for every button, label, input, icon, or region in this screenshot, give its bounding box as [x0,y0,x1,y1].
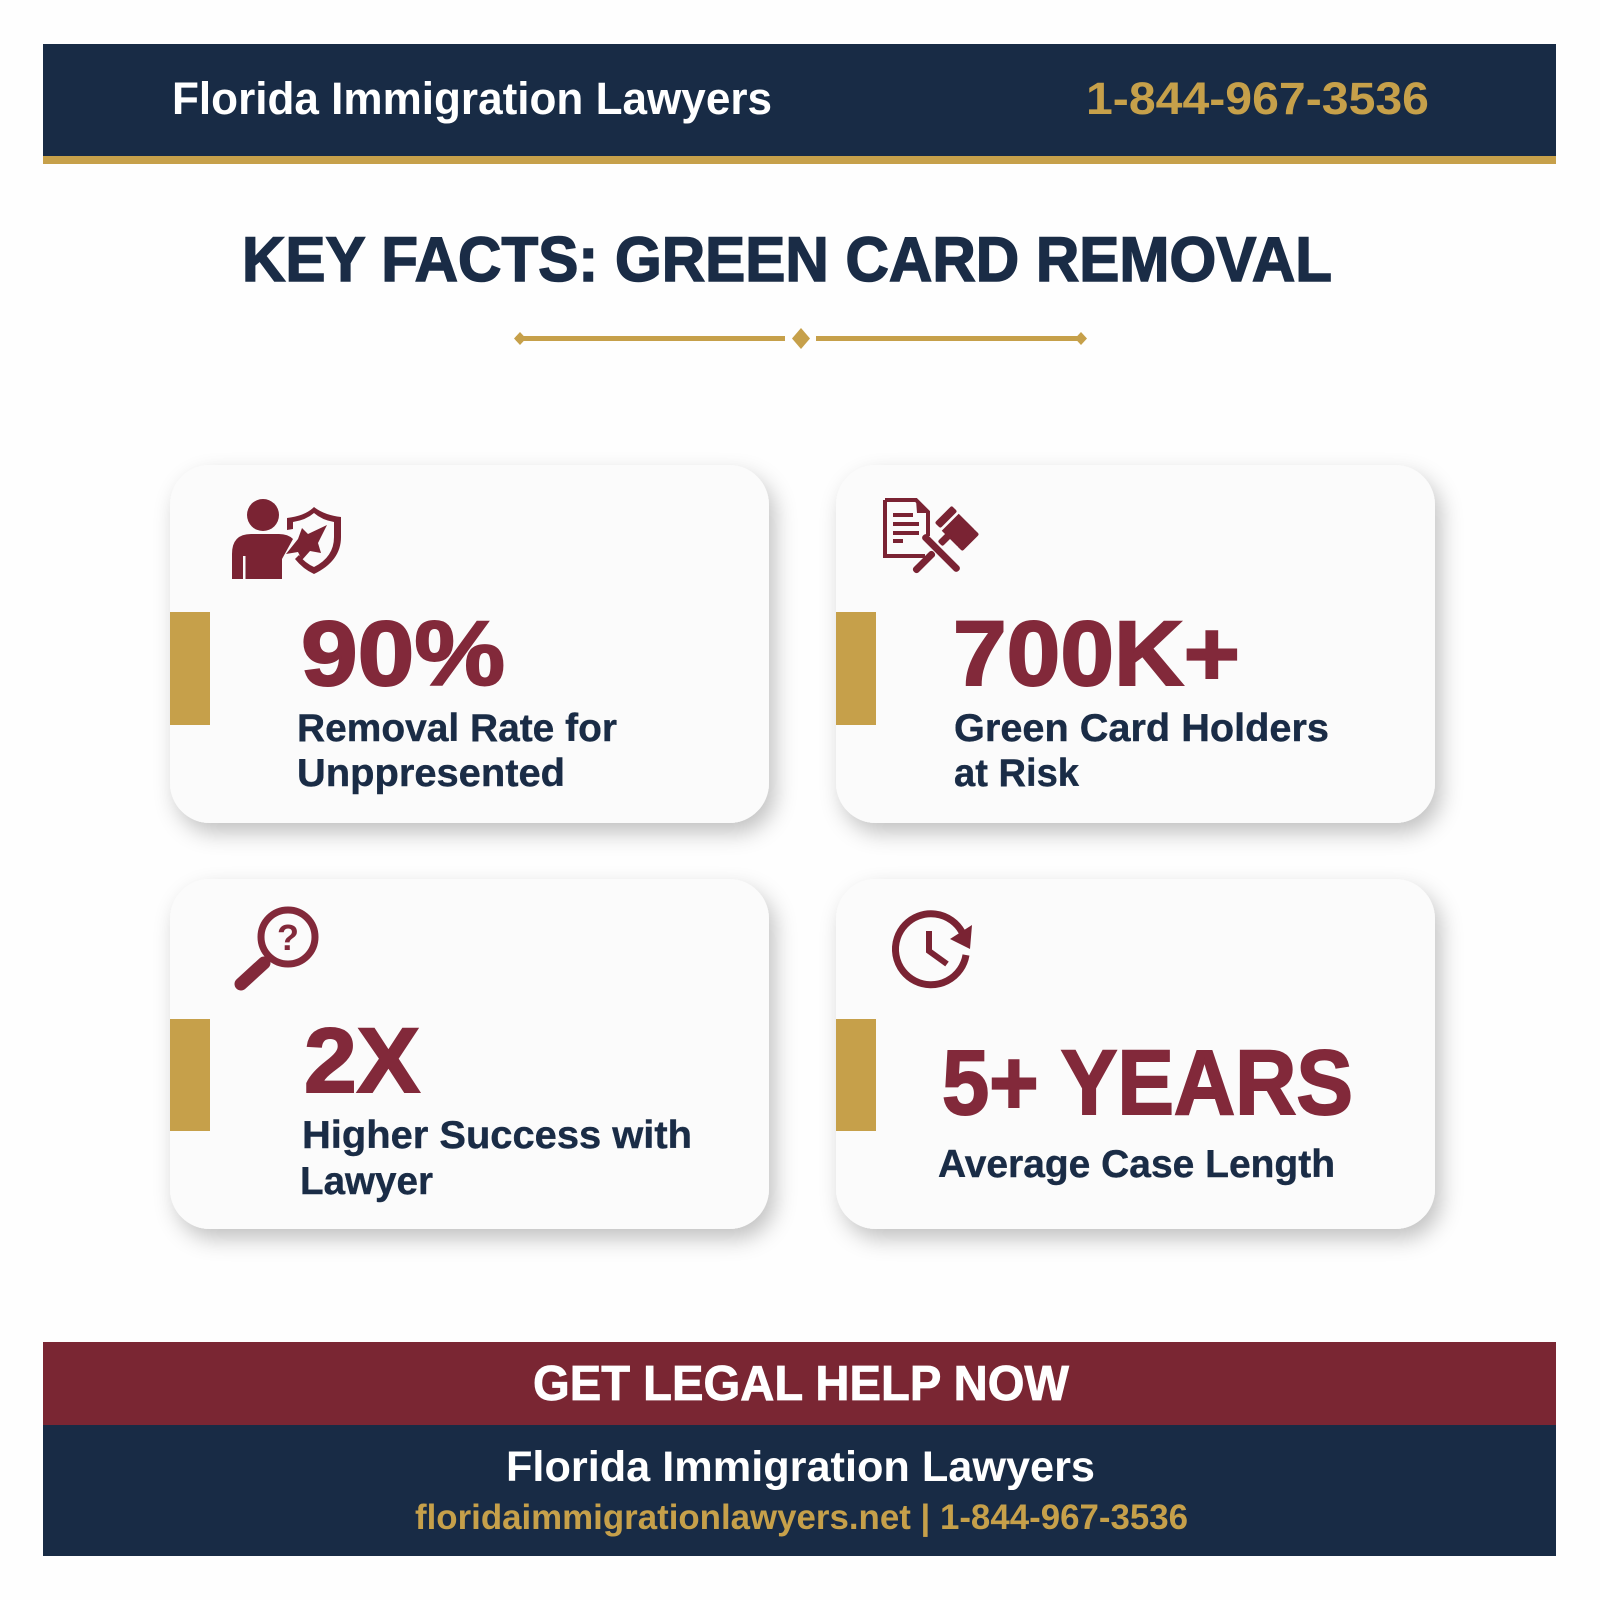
panel: 700K+ holders [836,465,1435,823]
label: green card holders: Green Card Holders [954,707,1329,750]
panel: 90% removal rate [170,465,769,823]
stat: 700K+: 700K+ [953,603,1240,705]
icon: magnifier with question mark: ? [277,917,299,958]
call to action band [43,1342,1556,1425]
icon: person with shield [232,499,341,579]
label: removal rate: Unppresented [297,752,565,795]
icon: magnifier with question mark [241,910,315,984]
title divider [514,328,1087,349]
panel: 2X success [170,879,769,1229]
label: higher success: Higher Success with [302,1114,692,1157]
panel: 5+ years [836,879,1435,1229]
stat: 2X: 2X [304,1010,420,1112]
header phone number: 1-844-967-3536 [1086,73,1429,124]
label: higher success [300,1114,692,1203]
label: green card holders: at Risk [954,752,1079,795]
footer firm name: Florida Immigration Lawyers [506,1443,1095,1491]
icon: document and gavel [885,500,979,574]
label: average case length: Average Case Length [938,1143,1335,1186]
label: removal rate [297,707,617,795]
icon: clock with arrow [895,914,972,985]
footer band [43,1425,1556,1556]
title: KEY FACTS: GREEN CARD REMOVAL [242,225,1332,295]
stat: 5+ years: 5+ YEARS [942,1032,1353,1134]
label: green card holders [954,707,1329,795]
stat: 90%: 90% [301,603,505,705]
label: removal rate: Removal Rate for [297,707,617,750]
header band [43,44,1556,164]
header firm name: Florida Immigration Lawyers [172,73,772,124]
label: higher success: Lawyer [300,1160,433,1203]
call to action text: GET LEGAL HELP NOW [533,1357,1070,1411]
footer website and phone: floridaimmigrationlawyers.net | 1-844-967-3536 [415,1498,1188,1537]
